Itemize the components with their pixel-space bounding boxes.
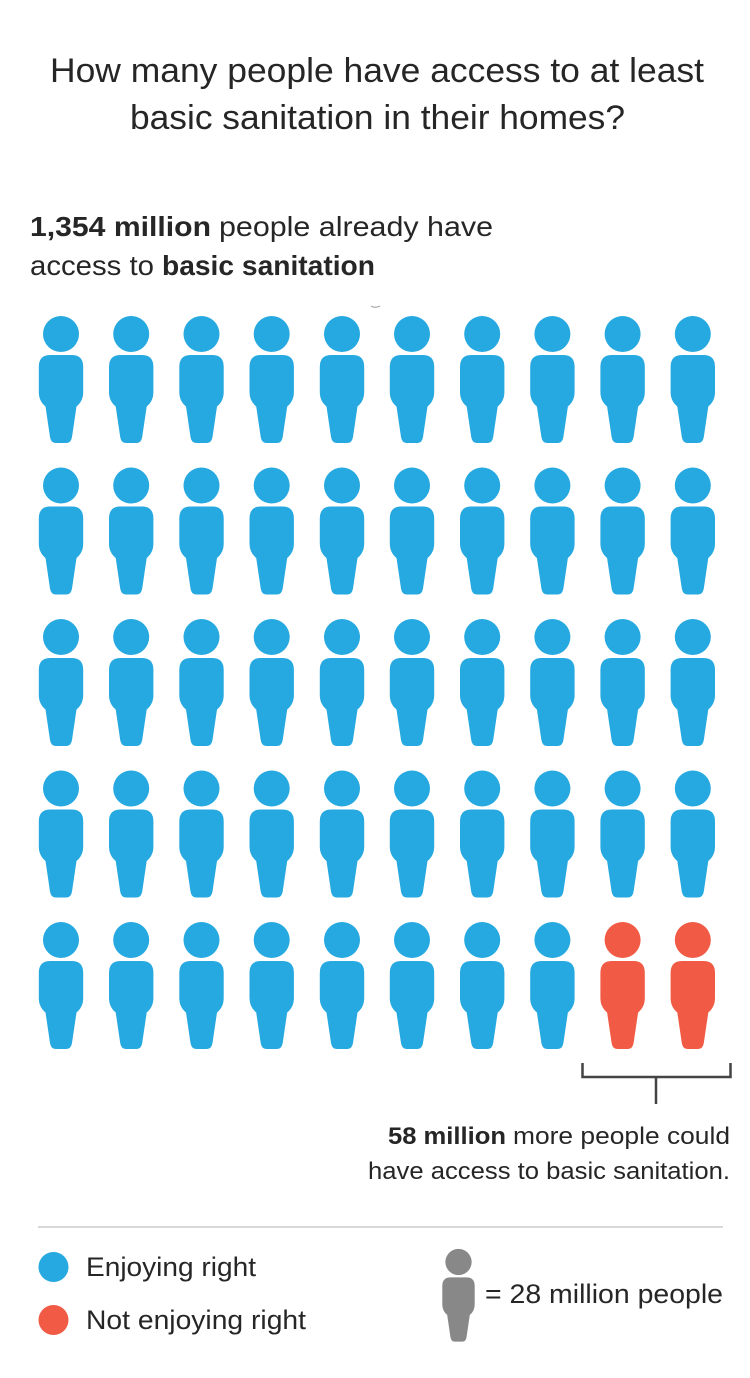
- title: [50, 52, 705, 137]
- legend: enjoying right: Enjoying right: [86, 1252, 257, 1282]
- bracket: [582, 1063, 730, 1104]
- row 4: [39, 770, 715, 898]
- row 5: red people: [600, 922, 715, 1049]
- callout: 58 million: more people could: [513, 1123, 730, 1150]
- callout: 58 million: [368, 1123, 730, 1185]
- title: basic sanitation in their homes?: [130, 99, 625, 137]
- row 3: [39, 619, 715, 746]
- intro text: 1,354 million: 1,354 million: [30, 211, 211, 242]
- intro text: 1,354 million: [30, 211, 493, 281]
- row 1: [39, 316, 715, 443]
- intro text: 1,354 million: people already have: [219, 211, 493, 242]
- legend: unit person: = 28 million people: [485, 1279, 723, 1309]
- row 5: blue people: [39, 922, 575, 1049]
- intro text: 1,354 million: basic sanitation: [162, 250, 375, 281]
- callout: 58 million: have access to basic sanitation.: [368, 1158, 730, 1185]
- pictogram: 50 people: [39, 316, 715, 1049]
- title: How many people have access to at least: [50, 52, 705, 90]
- legend: unit person: [442, 1249, 723, 1342]
- callout: 58 million: 58 million: [388, 1123, 506, 1150]
- intro text: 1,354 million: access to: [30, 250, 154, 281]
- legend: not enjoying right: Not enjoying right: [86, 1305, 307, 1335]
- row 2: [39, 468, 715, 594]
